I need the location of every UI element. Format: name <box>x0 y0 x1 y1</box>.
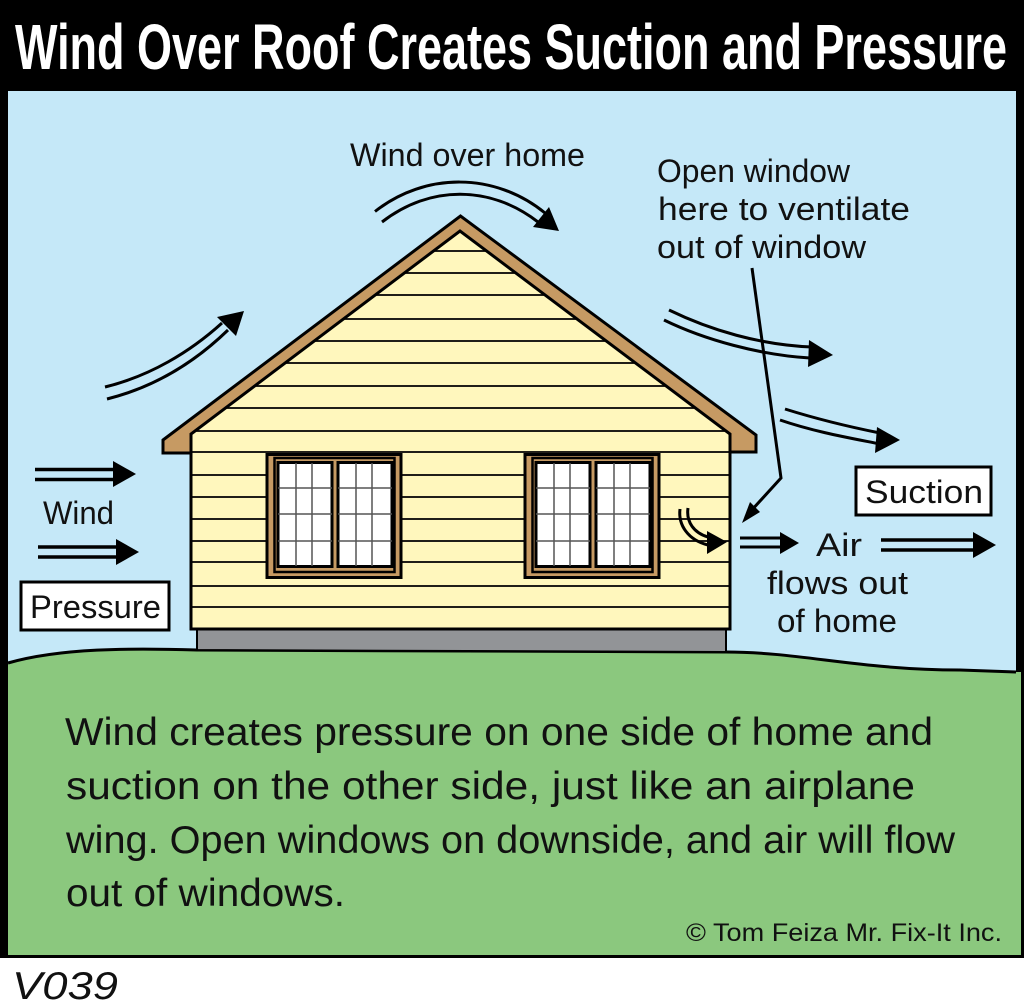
arrow: wind up the roof <box>105 311 244 399</box>
arrow: wind past eave <box>780 409 900 453</box>
roof <box>163 216 756 453</box>
label: Open window: Open window <box>657 153 851 189</box>
panel: sky <box>8 91 1016 681</box>
arrow: air flowing away <box>881 532 996 558</box>
label: Air flows out of home: Air <box>816 527 862 563</box>
arrow: wind lower left <box>38 539 139 565</box>
label: Pressure: Pressure <box>30 589 161 625</box>
text block: explanation: out of windows. <box>66 872 345 915</box>
label: Pressure <box>21 582 169 630</box>
label: Open window <box>657 153 910 265</box>
right window <box>525 454 659 578</box>
label: Suction: Suction <box>865 474 983 510</box>
label: Air flows out of home: flows out <box>767 565 908 601</box>
text block: explanation: wing. Open windows on downside, and air will flow <box>65 819 956 862</box>
label: Open window: here to ventilate <box>658 191 910 227</box>
arrow: wind over peak <box>375 182 559 231</box>
text block: explanation <box>65 711 956 915</box>
leader arrow to window <box>742 268 781 523</box>
foundation <box>197 629 726 652</box>
panel: ground <box>8 649 1021 955</box>
text block: explanation: Wind creates pressure on one side of home and <box>65 711 933 754</box>
house <box>163 216 756 652</box>
label: Air flows out of home: of home <box>777 603 897 639</box>
label: Wind: Wind <box>43 495 114 531</box>
arrow: wind leaving roof <box>664 310 833 367</box>
copyright: © Tom Feiza Mr. Fix-It Inc. <box>686 919 1002 947</box>
arrow: air leaving window <box>740 532 799 554</box>
arrow: air inside house <box>680 508 727 554</box>
ground outline <box>8 649 1016 672</box>
label: Air flows out of home <box>767 527 908 639</box>
text block: explanation: suction on the other side, just like an airplane <box>66 765 915 808</box>
wall siding <box>180 230 740 629</box>
label: Suction <box>856 467 991 515</box>
label: Open window: out of window <box>657 229 867 265</box>
arrow: wind upper left <box>35 461 136 487</box>
left window <box>267 454 401 578</box>
label: Wind over home: Wind over home <box>350 137 585 173</box>
